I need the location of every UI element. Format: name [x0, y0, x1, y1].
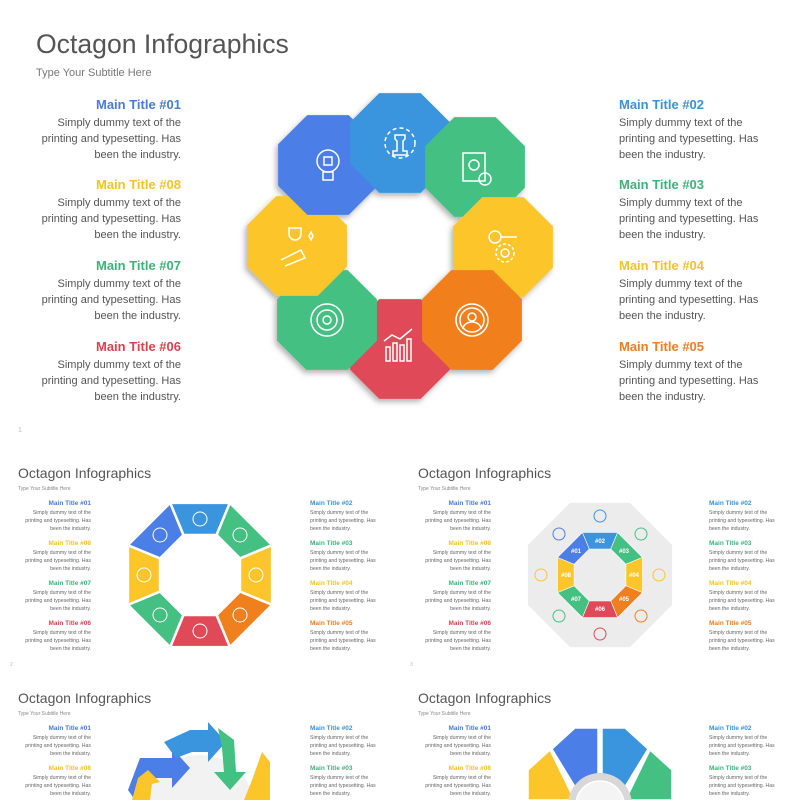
- thumbnail slide 5: Octagon Infographics: [418, 690, 551, 706]
- gray octagon with inner colored ring: [528, 503, 672, 647]
- thumbnail slide 3: printing and typesetting. Has: [425, 518, 491, 524]
- thumbnail slide 4: been the industry.: [310, 751, 351, 757]
- thumbnail slide 4: Simply dummy text of the: [33, 735, 91, 741]
- block 01: been the industry.: [94, 149, 181, 161]
- block 04: been the industry.: [619, 310, 706, 322]
- block 01: printing and typesetting. Has: [42, 133, 181, 145]
- thumbnail slide 3: been the industry.: [450, 606, 491, 612]
- thumbnail slide 4: Simply dummy text of the: [310, 775, 368, 781]
- thumbnail slide 2: been the industry.: [50, 646, 91, 652]
- thumbnail slide 5: been the industry.: [450, 791, 491, 797]
- thumbnail slide 5: [418, 690, 775, 800]
- thumbnail slide 3: been the industry.: [709, 566, 750, 572]
- thumbnail slide 2: Main Title #02: [310, 500, 353, 507]
- thumbnail slide 5: printing and typesetting. Has: [709, 743, 775, 749]
- thumbnail slide 2: Simply dummy text of the: [310, 590, 368, 596]
- thumbnail slide 2: Main Title #06: [48, 620, 91, 627]
- octagon 04 yellow: [453, 197, 553, 297]
- thumbnail slide 2: Main Title #05: [310, 620, 353, 627]
- block 03: been the industry.: [619, 229, 706, 241]
- thumbnail slide 4: been the industry.: [50, 751, 91, 757]
- thumbnail slide 3: [410, 465, 775, 668]
- thumbnail slide 2: Main Title #03: [310, 540, 353, 547]
- thumbnail slide 2: printing and typesetting. Has: [25, 518, 91, 524]
- octagon ring: [247, 93, 553, 399]
- block 06: [42, 339, 181, 403]
- arrow ring: [128, 722, 270, 800]
- thumbnail slide 4: Simply dummy text of the: [310, 735, 368, 741]
- thumbnail slide 2: printing and typesetting. Has: [310, 598, 376, 604]
- thumbnail slide 4: [18, 690, 376, 800]
- thumbnail slide 3: been the industry.: [709, 646, 750, 652]
- thumbnail slide 4: been the industry.: [50, 791, 91, 797]
- block 02: printing and typesetting. Has: [619, 133, 759, 145]
- thumbnail slide 4: Main Title #03: [310, 765, 353, 772]
- thumbnail slide 3: printing and typesetting. Has: [709, 518, 775, 524]
- thumbnail slide 3: been the industry.: [450, 646, 491, 652]
- block 06: Main Title #06: [96, 339, 181, 354]
- thumbnail slide 5: Main Title #08: [448, 765, 491, 772]
- thumbnail slide 4: Main Title #02: [310, 725, 353, 732]
- block 06: printing and typesetting. Has: [42, 375, 181, 387]
- gray octagon with inner colored ring: #02: [595, 539, 606, 545]
- thumbnail slide 2: Simply dummy text of the: [33, 550, 91, 556]
- thumbnail slide 2: 2: [10, 662, 13, 668]
- octagon 07 green: [277, 270, 377, 370]
- gray octagon with inner colored ring: #03: [619, 549, 630, 555]
- thumbnail slide 3: printing and typesetting. Has: [425, 598, 491, 604]
- block 02: been the industry.: [619, 149, 706, 161]
- thumbnail slide 2: Simply dummy text of the: [310, 550, 368, 556]
- thumbnail slide 5: Main Title #03: [709, 765, 752, 772]
- block 07: been the industry.: [94, 310, 181, 322]
- block 06: been the industry.: [94, 391, 181, 403]
- block 03: Main Title #03: [619, 177, 704, 192]
- block 05: Simply dummy text of the: [619, 359, 742, 371]
- block 04: Main Title #04: [619, 258, 705, 273]
- thumbnail slide 4: printing and typesetting. Has: [310, 783, 376, 789]
- gray octagon with inner colored ring: #07: [571, 597, 582, 603]
- thumbnail slide 2: Main Title #01: [48, 500, 91, 507]
- thumbnail slide 4: Main Title #01: [48, 725, 91, 732]
- block 02: [619, 97, 759, 161]
- block 01: Main Title #01: [96, 97, 181, 112]
- thumbnail slide 2: [10, 465, 376, 668]
- block 05: been the industry.: [619, 391, 706, 403]
- thumbnail slide 3: Simply dummy text of the: [709, 630, 767, 636]
- octagon 05 orange: [422, 270, 522, 370]
- thumbnail slide 5: Simply dummy text of the: [433, 735, 491, 741]
- block 08: been the industry.: [94, 229, 181, 241]
- thumbnail slide 4: printing and typesetting. Has: [25, 783, 91, 789]
- block 08: Simply dummy text of the: [58, 197, 181, 209]
- block 01: [42, 97, 181, 161]
- octagon 08 yellow: [247, 196, 347, 296]
- gray octagon with inner colored ring: #08: [561, 573, 572, 579]
- thumbnail slide 3: Simply dummy text of the: [709, 510, 767, 516]
- thumbnail slide 2: been the industry.: [50, 566, 91, 572]
- block 07: Simply dummy text of the: [58, 278, 181, 290]
- thumbnail slide 4: been the industry.: [310, 791, 351, 797]
- thumbnail slide 3: Octagon Infographics: [418, 465, 551, 481]
- page number 1: 1: [18, 427, 22, 434]
- thumbnail slide 2: Simply dummy text of the: [33, 590, 91, 596]
- thumbnail slide 2: been the industry.: [50, 526, 91, 532]
- block 06: Simply dummy text of the: [58, 359, 181, 371]
- block 04: [619, 258, 759, 322]
- thumbnail slide 3: printing and typesetting. Has: [709, 638, 775, 644]
- block 05: [619, 339, 759, 403]
- thumbnail slide 3: been the industry.: [709, 606, 750, 612]
- thumbnail slide 2: been the industry.: [310, 566, 351, 572]
- thumbnail slide 4: Type Your Subtitle Here: [18, 711, 71, 717]
- thumbnail slide 3: Main Title #01: [448, 500, 491, 507]
- thumbnail slide 3: been the industry.: [450, 526, 491, 532]
- thumbnail slide 4: Main Title #08: [48, 765, 91, 772]
- thumbnail slide 3: been the industry.: [709, 526, 750, 532]
- subtitle: Type Your Subtitle Here: [36, 67, 152, 79]
- thumbnail slide 5: printing and typesetting. Has: [425, 743, 491, 749]
- thumbnail slide 2: printing and typesetting. Has: [310, 518, 376, 524]
- thumbnail slide 5: Type Your Subtitle Here: [418, 711, 471, 717]
- block 07: Main Title #07: [96, 258, 181, 273]
- thumbnail slide 2: printing and typesetting. Has: [25, 558, 91, 564]
- thumbnail slide 3: printing and typesetting. Has: [709, 598, 775, 604]
- thumbnail slide 5: Simply dummy text of the: [433, 775, 491, 781]
- thumbnail slide 2: printing and typesetting. Has: [25, 638, 91, 644]
- thumbnail slide 2: Main Title #04: [310, 580, 353, 587]
- thumbnail slide 2: Main Title #07: [48, 580, 91, 587]
- thumbnail slide 2: Simply dummy text of the: [310, 510, 368, 516]
- thumbnail slide 3: printing and typesetting. Has: [425, 638, 491, 644]
- thumbnail slide 5: Simply dummy text of the: [709, 735, 767, 741]
- block 03: [619, 177, 759, 241]
- thumbnail slide 2: been the industry.: [310, 646, 351, 652]
- thumbnail slide 5: Main Title #01: [448, 725, 491, 732]
- thumbnail slide 5: been the industry.: [450, 751, 491, 757]
- thumbnail slide 3: Main Title #07: [448, 580, 491, 587]
- left text blocks: [42, 97, 181, 403]
- block 08: [42, 177, 181, 241]
- thumbnail slide 5: printing and typesetting. Has: [425, 783, 491, 789]
- thumbnail slide 4: printing and typesetting. Has: [25, 743, 91, 749]
- thumbnail slide 3: Main Title #03: [709, 540, 752, 547]
- gray octagon with inner colored ring: #05: [619, 597, 630, 603]
- thumbnail slide 3: Main Title #02: [709, 500, 752, 507]
- thumbnail slide 2: printing and typesetting. Has: [310, 558, 376, 564]
- thumbnail slide 2: Simply dummy text of the: [33, 630, 91, 636]
- block 01: Simply dummy text of the: [58, 117, 181, 129]
- thumbnail slide 3: Simply dummy text of the: [709, 590, 767, 596]
- thumbnail slide 3: Simply dummy text of the: [433, 590, 491, 596]
- block 07: printing and typesetting. Has: [42, 294, 181, 306]
- thumbnail slide 2: Simply dummy text of the: [310, 630, 368, 636]
- thumbnail slide 3: been the industry.: [450, 566, 491, 572]
- thumbnail slide 3: 3: [410, 662, 413, 668]
- block 04: Simply dummy text of the: [619, 278, 742, 290]
- thumbnail slide 5: Simply dummy text of the: [709, 775, 767, 781]
- octagon 03 green: [425, 117, 525, 217]
- block 08: Main Title #08: [96, 177, 181, 192]
- thumbnail slide 3: Main Title #04: [709, 580, 752, 587]
- thumbnail slide 2: Main Title #08: [48, 540, 91, 547]
- thumbnail slide 2: been the industry.: [310, 606, 351, 612]
- thumbnail slide 3: Main Title #05: [709, 620, 752, 627]
- block 02: Main Title #02: [619, 97, 704, 112]
- thumbnail slide 3: Main Title #06: [448, 620, 491, 627]
- gray octagon with inner colored ring: #04: [629, 573, 640, 579]
- thumbnail slide 3: printing and typesetting. Has: [425, 558, 491, 564]
- half octagon segments: [528, 728, 672, 800]
- thumbnail slide 3: printing and typesetting. Has: [709, 558, 775, 564]
- block 04: printing and typesetting. Has: [619, 294, 759, 306]
- segmented octagon ring: [128, 503, 272, 647]
- block 07: [42, 258, 181, 322]
- thumbnail slide 3: Simply dummy text of the: [433, 630, 491, 636]
- thumbnail slide 4: printing and typesetting. Has: [310, 743, 376, 749]
- thumbnail slide 3: Simply dummy text of the: [433, 550, 491, 556]
- gray octagon with inner colored ring: #06: [595, 607, 606, 613]
- right text blocks: [619, 97, 759, 403]
- thumbnail slide 5: been the industry.: [709, 751, 750, 757]
- main title: Octagon Infographics: [36, 29, 289, 59]
- thumbnail slide 5: Main Title #02: [709, 725, 752, 732]
- thumbnail slide 2: Octagon Infographics: [18, 465, 151, 481]
- thumbnail slide 4: Simply dummy text of the: [33, 775, 91, 781]
- thumbnail slide 3: Simply dummy text of the: [433, 510, 491, 516]
- octagon 01 blue: [278, 115, 378, 215]
- thumbnail slide 2: been the industry.: [310, 526, 351, 532]
- thumbnail slide 3: Main Title #08: [448, 540, 491, 547]
- block 03: printing and typesetting. Has: [619, 213, 759, 225]
- thumbnail slide 3: Simply dummy text of the: [709, 550, 767, 556]
- block 03: Simply dummy text of the: [619, 197, 742, 209]
- thumbnail slide 3: Type Your Subtitle Here: [418, 486, 471, 492]
- thumbnail slide 2: printing and typesetting. Has: [310, 638, 376, 644]
- block 02: Simply dummy text of the: [619, 117, 742, 129]
- block 05: printing and typesetting. Has: [619, 375, 759, 387]
- octagon 02 blue: [350, 93, 450, 193]
- thumbnail slide 5: printing and typesetting. Has: [709, 783, 775, 789]
- octagon 06 red: [350, 299, 450, 399]
- gray octagon with inner colored ring: #01: [571, 549, 582, 555]
- block 05: Main Title #05: [619, 339, 704, 354]
- thumbnail slide 2: Simply dummy text of the: [33, 510, 91, 516]
- thumbnail slide 4: Octagon Infographics: [18, 690, 151, 706]
- thumbnail slide 5: been the industry.: [709, 791, 750, 797]
- block 08: printing and typesetting. Has: [42, 213, 181, 225]
- thumbnail slide 2: printing and typesetting. Has: [25, 598, 91, 604]
- thumbnail slide 2: been the industry.: [50, 606, 91, 612]
- thumbnail slide 2: Type Your Subtitle Here: [18, 486, 71, 492]
